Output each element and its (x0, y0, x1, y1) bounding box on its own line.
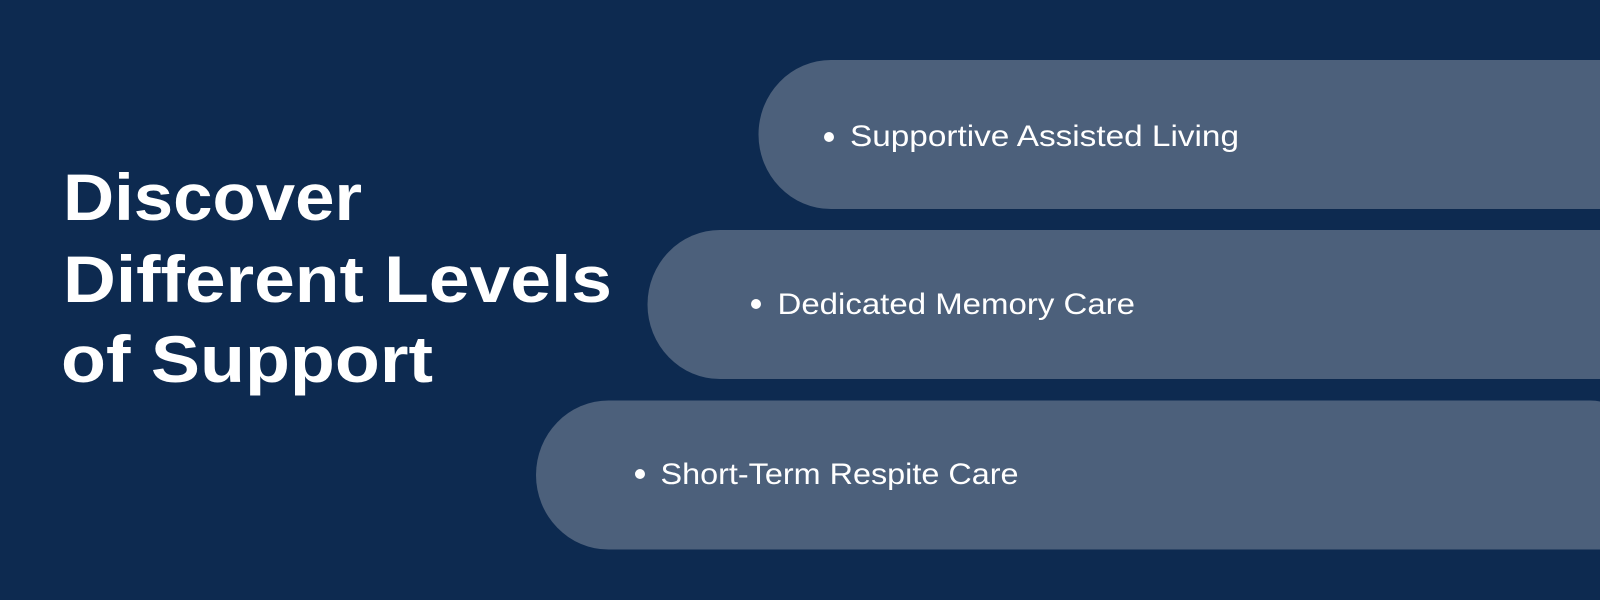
title (61, 160, 612, 396)
bullet (635, 469, 645, 479)
panel: dedicated memory care (648, 230, 1600, 379)
label: Supportive Assisted Living (850, 120, 1239, 153)
panel: supportive assisted living (758, 60, 1600, 209)
bullet (824, 132, 834, 142)
label: Short-Term Respite Care (660, 458, 1018, 491)
title: of Support (61, 322, 433, 396)
bullet (751, 299, 761, 309)
title: Different Levels (63, 242, 612, 316)
title: Discover (63, 160, 362, 234)
panel: short-term respite care (536, 400, 1600, 550)
label: Dedicated Memory Care (778, 288, 1135, 321)
